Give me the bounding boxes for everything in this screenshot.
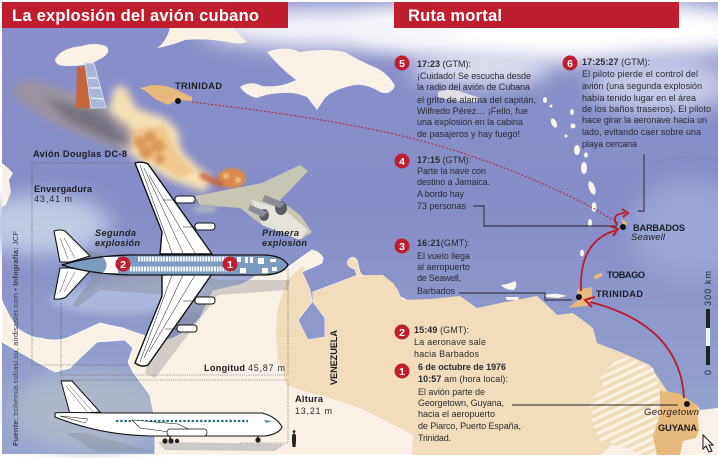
plane dimension labels: 45,87 m	[248, 363, 285, 373]
step 1: Trinidad.	[418, 433, 451, 443]
step 5: de pasajeros y hay fuego!	[417, 129, 520, 139]
scale bar: 300 km	[703, 271, 713, 306]
step 3: Barbados	[417, 286, 456, 296]
cloud over tail	[55, 44, 108, 66]
header: left title: La explosión del avión cubano	[12, 7, 259, 25]
plane dimension labels	[33, 149, 332, 416]
step 2: La aeronave sale	[414, 337, 486, 347]
map: east cream land	[680, 408, 718, 455]
map labels: Georgetown	[644, 407, 699, 418]
aircraft: side view	[55, 381, 282, 444]
smoke trail	[12, 81, 132, 150]
step 4: destino a Jamaica.	[417, 177, 490, 187]
map labels: TRINIDAD	[175, 81, 222, 91]
map: Barbados	[621, 218, 628, 227]
map: Trinidad	[568, 287, 592, 308]
map: north islands	[2, 28, 395, 207]
header: left title	[2, 2, 288, 28]
explosion markers: 2	[120, 259, 126, 271]
map labels: Seawell	[631, 232, 666, 243]
header: right title	[394, 2, 679, 28]
aircraft: top view Douglas DC-8	[54, 162, 288, 366]
step 3	[394, 238, 470, 296]
map labels: TRINIDAD	[596, 289, 643, 299]
explosion labels: Primera	[262, 228, 299, 238]
scale bar	[703, 271, 713, 375]
map labels: VENEZUELA	[329, 330, 339, 385]
fire glow	[104, 86, 212, 192]
step 6: avión (una segunda explosión	[582, 81, 702, 91]
location dots	[175, 98, 690, 407]
engines	[163, 196, 215, 332]
step 4: A bordo hay	[417, 189, 464, 199]
route: dotted flight path to Jamaica	[192, 102, 618, 223]
step 5: Wilfredo Pérez… ¡Fello, fue	[417, 106, 528, 116]
burning plane body	[193, 165, 312, 240]
photo: explosion of the Cubana plane	[12, 63, 312, 240]
step 6: 6	[567, 58, 573, 70]
step 6: había tenido lugar en el área	[582, 93, 696, 103]
aircraft: side view shadow	[66, 433, 285, 452]
plane dimension labels: Avión Douglas DC-8	[33, 149, 127, 159]
step 4: 73 personas	[417, 201, 466, 211]
step 3: El vuelo llega	[417, 251, 470, 261]
map labels: TOBAGO	[607, 270, 645, 280]
step 2: 2	[399, 327, 405, 339]
map: hatched Suriname / Guiana region	[590, 355, 660, 455]
step 6: lado, evitando caer sobre una	[582, 127, 701, 137]
Cuba west tip at left edge	[2, 163, 13, 207]
lower wing	[135, 274, 212, 366]
arrow: Trinidad to Barbados	[581, 226, 618, 291]
fireball texture	[134, 131, 165, 164]
step 5: 5	[399, 58, 405, 70]
step 5: ¡Cuidado! Se escucha desde	[417, 71, 531, 81]
step 1: 1	[399, 366, 405, 378]
leader lines	[459, 154, 678, 405]
step 5: el grito de alarma del capitán,	[417, 95, 536, 105]
step 4: 17:15 (GTM):	[417, 155, 471, 165]
map: South and Central America, cream land	[2, 250, 718, 455]
step 5: una explosion en la cabina	[417, 117, 523, 127]
arrow: return loop at Barbados	[615, 209, 628, 225]
step 6: 17:25:27 (GTM):	[582, 57, 650, 67]
step 4: 4	[399, 156, 405, 168]
secondary fireball	[200, 168, 246, 188]
explosion labels	[95, 228, 307, 248]
map: Venezuela and Brazil, tan land	[276, 266, 700, 455]
explosion labels: explosión	[95, 238, 140, 248]
tail stabilizers	[54, 230, 90, 299]
step 6: El piloto pierde el control del	[582, 69, 698, 79]
step 2: hacia Barbados	[414, 349, 480, 359]
map: Jamaica	[140, 85, 192, 105]
step 2: 15:49 (GMT):	[414, 325, 469, 335]
step 1	[394, 362, 521, 443]
step 1: de Piarco, Puerto España,	[418, 421, 521, 431]
island: Hispaniola	[240, 48, 395, 110]
step 1: El avión parte de	[418, 387, 485, 397]
explosion markers: 1	[227, 259, 233, 271]
explosion markers	[116, 256, 238, 272]
map: Tobago	[593, 272, 603, 280]
map labels: BARBADOS	[633, 223, 685, 233]
icon: person for scale	[292, 430, 296, 447]
step 1: Georgetown, Guyana,	[418, 398, 504, 408]
step 6: hace girar la aeronave hacia un	[582, 115, 707, 125]
icon: mouse cursor	[703, 435, 713, 452]
source credit: Fuente: bohemia.cubasi.cu, airdisaster.com • Infografía: JCF	[11, 231, 20, 446]
arrow: Georgetown to Trinidad	[585, 297, 684, 398]
plane dimension labels: Altura	[295, 394, 324, 404]
plane dimension labels: Longitud	[204, 363, 245, 373]
front cabin	[237, 257, 277, 273]
step 6	[562, 56, 711, 149]
map: cream wedge bottom	[600, 445, 640, 455]
step 1: hacia el aeropuerto	[418, 409, 495, 419]
island: Cuba	[157, 28, 247, 48]
step 3: de Seawell,	[417, 273, 461, 283]
plane dimension labels: 43,41 m	[34, 194, 72, 204]
seat rows	[130, 259, 232, 269]
top-view plane shadow	[68, 246, 290, 378]
scale bar: 0	[703, 370, 713, 375]
map: Paraguana peninsula	[347, 257, 363, 276]
map: Puerto Rico and Lesser Antilles	[438, 90, 597, 300]
header: right title: Ruta mortal	[408, 7, 502, 25]
burning tail fin	[76, 63, 106, 108]
step 3: 16:21(GMT):	[417, 238, 470, 248]
dimension guide lines	[32, 163, 288, 443]
explosion labels: Segunda	[95, 228, 136, 238]
step 3: 3	[399, 241, 405, 253]
step 4: Parte la nave con	[417, 166, 486, 176]
map labels: GUYANA	[658, 423, 697, 433]
step 5	[394, 56, 536, 139]
fuselage	[62, 255, 288, 275]
map labels	[175, 81, 699, 433]
plane dimension labels: 13,21 m	[295, 406, 332, 416]
step 1: 10:57 am (hora local):	[418, 374, 508, 384]
rear section	[103, 257, 118, 273]
upper wing	[135, 162, 212, 254]
map: Guyana highlighted	[653, 391, 699, 455]
step 2	[394, 324, 486, 359]
step 5: la radio del avión de Cubana	[417, 82, 530, 92]
step 3: al aeropuerto	[417, 262, 470, 272]
step 6: playa cercana	[582, 139, 637, 149]
step 6: de los baños traseros). El piloto	[582, 104, 711, 114]
step 4	[394, 154, 490, 211]
step 1: 6 de octubre de 1976	[418, 362, 506, 372]
plane dimension labels: Envergadura	[34, 184, 93, 194]
step 5: 17:23 (GTM):	[417, 59, 471, 69]
explosion labels: explosión	[262, 238, 307, 248]
